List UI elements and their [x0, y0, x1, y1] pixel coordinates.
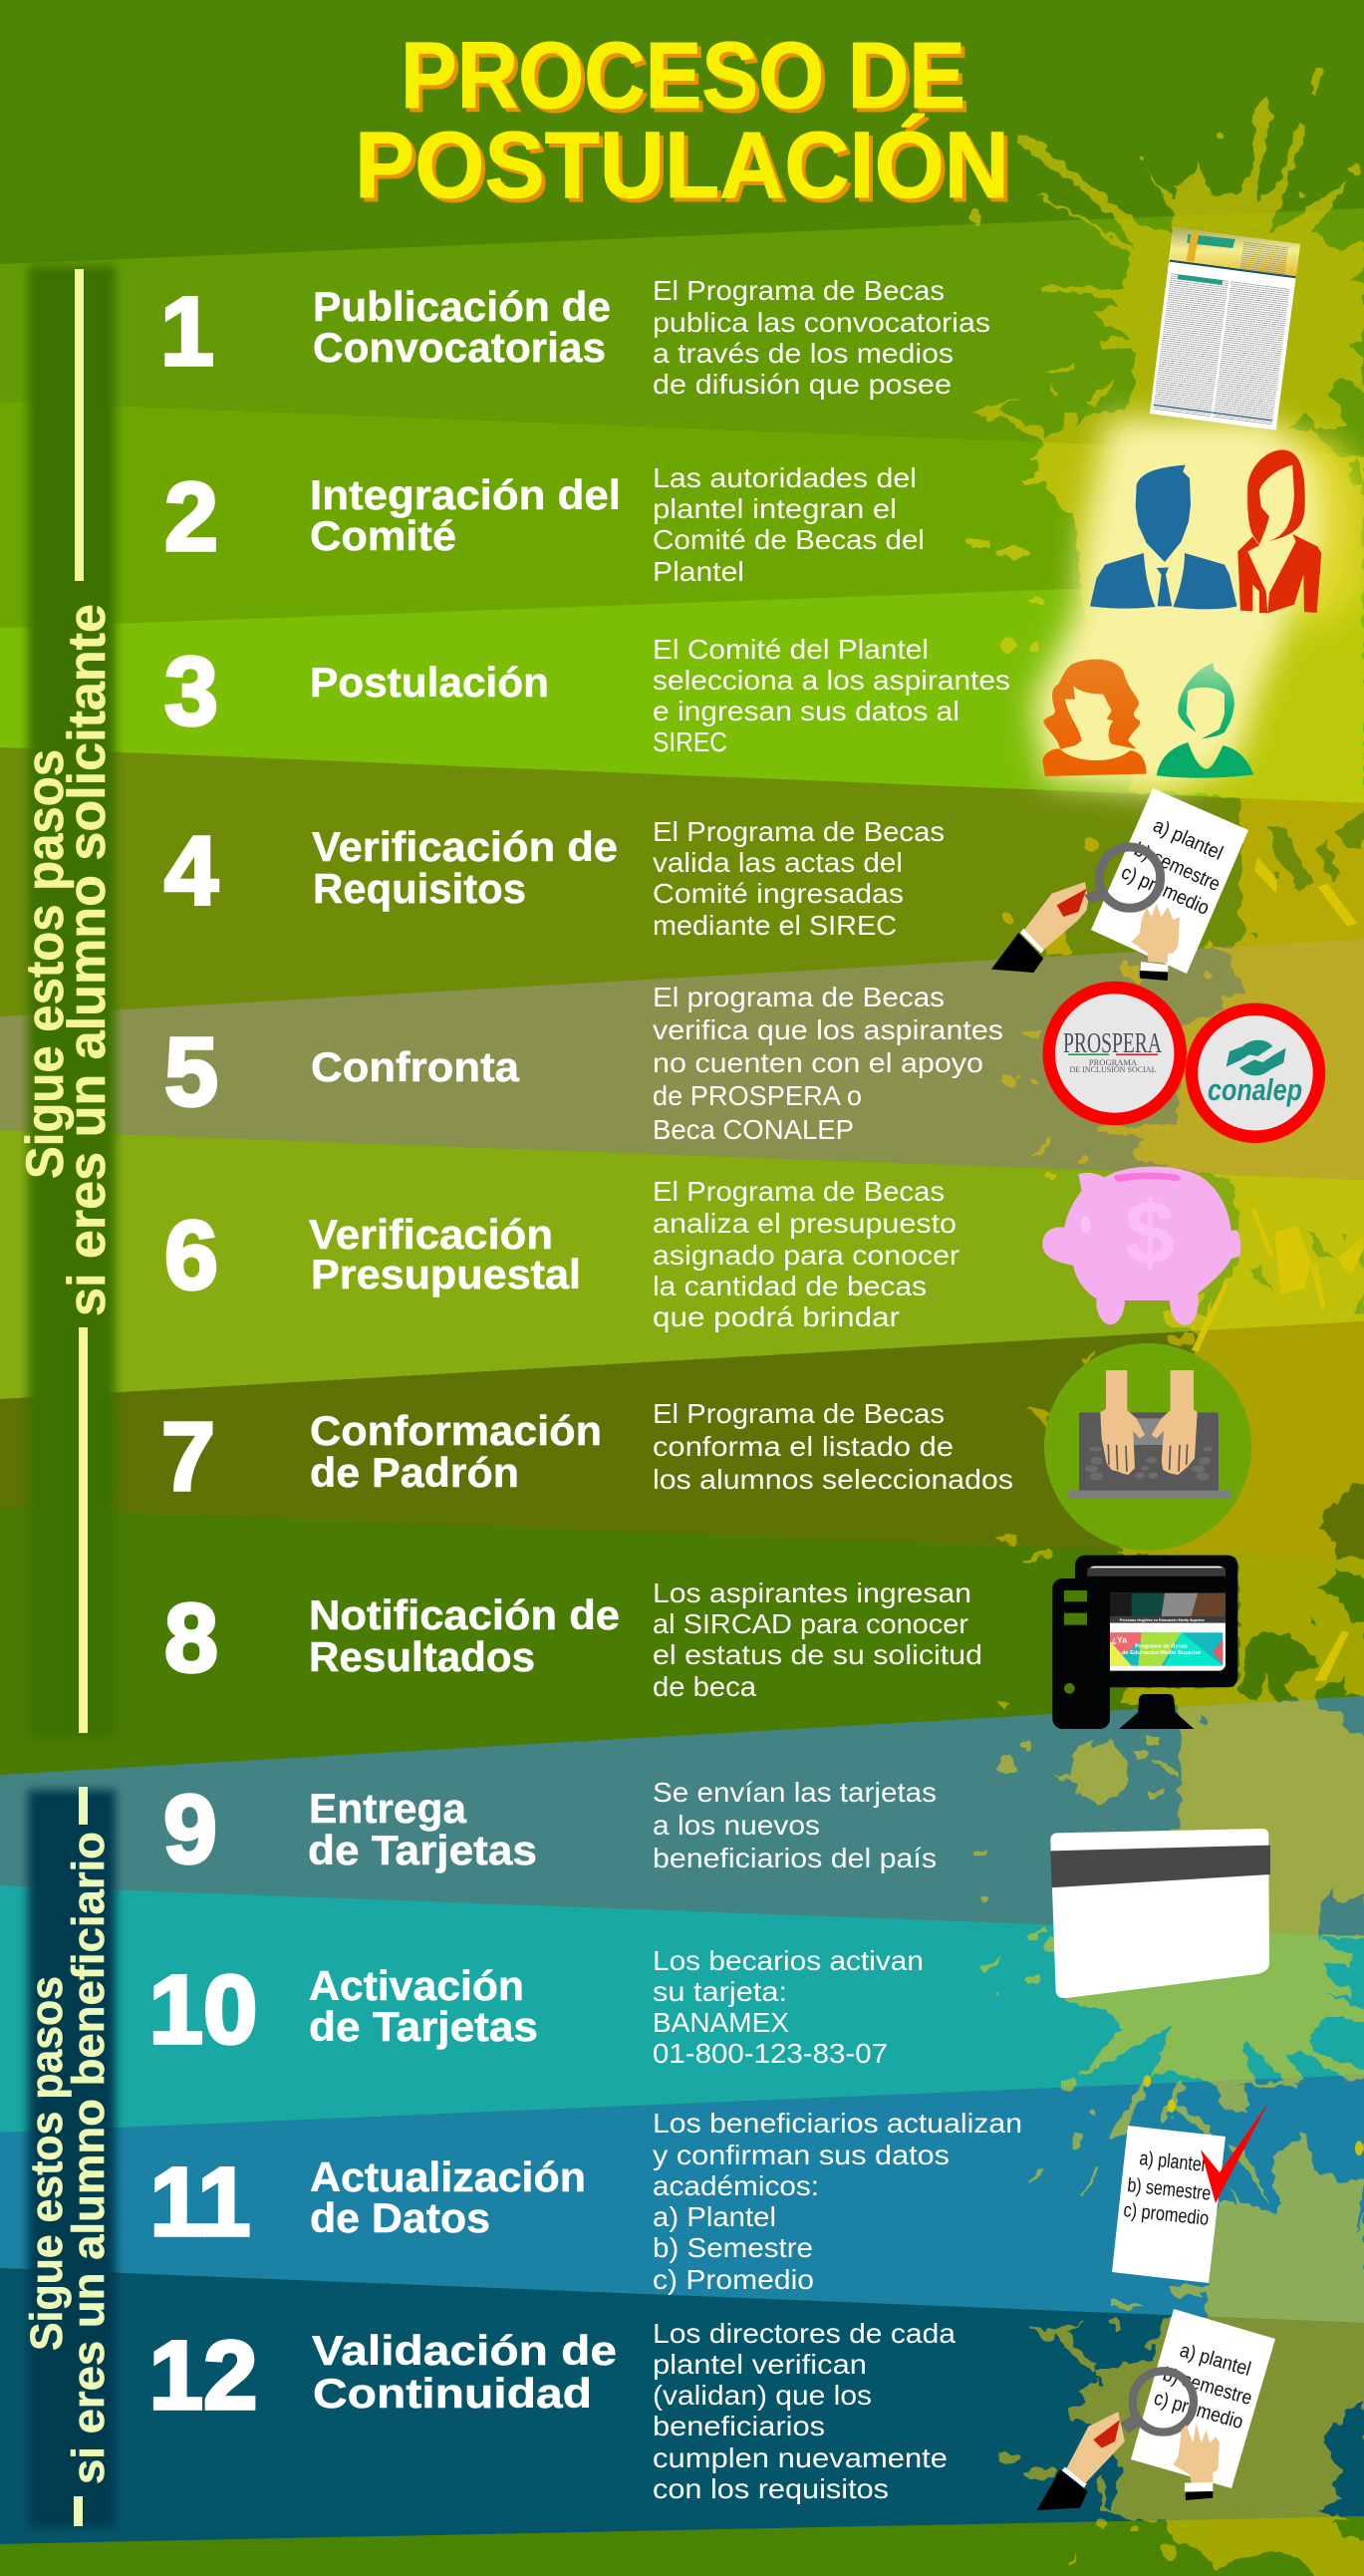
icon: piggy bank: $ [1125, 1184, 1175, 1284]
icon: hands with magnifier over a form: b) semestre [1161, 2364, 1254, 2410]
heading 10: Activación [309, 1962, 524, 2009]
icon: desktop computer with website [1052, 1556, 1237, 1729]
panel: step 10 [149, 1945, 924, 2069]
panel: step 9 [163, 1775, 1270, 1998]
sidebar: alumno beneficiario: Sigue estos pasos [21, 1976, 72, 2351]
icon: hands with magnifier over a form: c) promedio [1118, 861, 1213, 920]
description 5: verifica que los aspirantes [653, 1014, 1003, 1045]
heading 6: Presupuestal [311, 1251, 581, 1297]
heading 2: Integración del [310, 471, 621, 518]
icon: Conalep logo [1192, 1009, 1319, 1137]
description 4: mediante el SIREC [653, 910, 897, 941]
description 2: Comité de Becas del [653, 524, 925, 555]
description 3 [653, 634, 1010, 757]
heading 3: Postulación [310, 659, 549, 706]
description 8: el estatus de su solicitud [653, 1639, 982, 1670]
background: splash gaps [1095, 427, 1364, 2541]
description 3: e ingresan sus datos al [653, 696, 959, 726]
icon: checked form: a) plantel [1138, 2147, 1206, 2176]
description 2: Las autoridades del [653, 462, 917, 493]
description 9 [653, 1777, 937, 1873]
heading 8: Resultados [309, 1633, 535, 1680]
number 4: 4 [164, 816, 218, 925]
description 10: BANAMEX [653, 2007, 789, 2038]
icon: Prospera logo: DE INCLUSIÓN SOCIAL [1070, 1064, 1156, 1074]
number 8: 8 [164, 1583, 218, 1692]
description 3: El Comité del Plantel [653, 634, 929, 665]
background: yellow glow behind the people [1032, 419, 1364, 794]
icon: desktop computer with website: Personas elegibles en Educación Media Superior [1120, 1618, 1206, 1622]
description 4: Comité ingresadas [653, 878, 904, 909]
heading 9: de Tarjetas [308, 1827, 537, 1873]
description 11: y confirman sus datos [653, 2140, 950, 2170]
panel: step 1 [160, 227, 1300, 430]
panel: step 4 [164, 788, 1248, 981]
heading 10: de Tarjetas [309, 2003, 538, 2050]
title [355, 23, 1009, 218]
description 6: la cantidad de becas [653, 1271, 927, 1301]
description 5: de PROSPERA o [653, 1080, 862, 1111]
description 10: su tarjeta: [653, 1976, 787, 2007]
description 8: de beca [653, 1671, 756, 1702]
description 8: al SIRCAD para conocer [653, 1608, 968, 1639]
panel: step 8 [164, 1556, 1237, 1729]
sidebar: alumno solicitante [16, 265, 117, 1738]
description 10: Los becarios activan [653, 1945, 924, 1976]
description 11: b) Semestre [653, 2232, 813, 2263]
heading 7: Conformación [310, 1407, 602, 1454]
description 11: a) Plantel [653, 2201, 776, 2232]
heading 1: Convocatorias [313, 324, 606, 371]
description 6: analiza el presupuesto [653, 1208, 956, 1239]
heading 8 [309, 1591, 620, 1680]
description 10: 01-800-123-83-07 [653, 2038, 888, 2069]
number 2: 2 [164, 462, 218, 571]
description 9: Se envían las tarjetas [653, 1777, 937, 1808]
heading 9 [308, 1785, 537, 1873]
heading 10 [309, 1962, 538, 2050]
panel: step 2 [164, 450, 1321, 613]
description 12: Los directores de cada [653, 2318, 955, 2349]
description 12: con los requisitos [653, 2473, 889, 2504]
heading 1 [313, 283, 611, 371]
number 5: 5 [164, 1017, 218, 1126]
background: paint splashes [965, 68, 1364, 2576]
icon: hands with magnifier over a form: a) plantel [1178, 2340, 1253, 2381]
heading 6 [309, 1211, 581, 1297]
description 7 [653, 1398, 1013, 1495]
number 3: 3 [164, 637, 218, 745]
description 6: que podrá brindar [653, 1301, 900, 1332]
icon: Prospera logo: PROGRAMA [1089, 1057, 1138, 1067]
description 1 [653, 275, 990, 400]
description 8: Los aspirantes ingresan [653, 1577, 971, 1608]
heading 12 [312, 2327, 617, 2417]
heading 2 [310, 471, 621, 559]
icon: student silhouettes [1042, 660, 1253, 778]
icon: piggy bank [1042, 1167, 1240, 1325]
icon: hands with magnifier over a form: c) promedio [1152, 2388, 1245, 2433]
description 6: El Programa de Becas [653, 1176, 945, 1207]
icon: desktop computer with website: Programa de Becas [1135, 1643, 1188, 1649]
number 6: 6 [164, 1201, 218, 1309]
description 8 [653, 1577, 982, 1702]
description 1: publica las convocatorias [653, 307, 990, 338]
icon: hands on a laptop [1044, 1343, 1251, 1551]
heading 1: Publicación de [313, 283, 611, 330]
description 5 [653, 982, 1003, 1145]
description 9: beneficiarios del país [653, 1843, 937, 1873]
description 2 [653, 462, 925, 587]
description 1: El Programa de Becas [653, 275, 945, 306]
panel: step 7 [161, 1343, 1251, 1551]
icon: checked form: c) promedio [1122, 2199, 1210, 2230]
heading 12: Continuidad [313, 2370, 592, 2417]
number 7: 7 [161, 1402, 215, 1511]
icon: desktop computer with website: ¿Ya [1112, 1634, 1127, 1644]
description 12: plantel verifican [653, 2349, 867, 2380]
description 4: El Programa de Becas [653, 816, 945, 847]
icon: hands with magnifier over a form: a) plantel [1150, 814, 1227, 865]
description 11 [653, 2108, 1022, 2295]
sidebar: alumno beneficiario: si eres un alumno beneficiario [63, 1832, 114, 2484]
description 5: no cuenten con el apoyo [653, 1047, 983, 1078]
description 5: El programa de Becas [653, 982, 945, 1012]
description 11: c) Promedio [653, 2264, 814, 2295]
description 1: a través de los medios [653, 338, 954, 369]
panel: step 11 [149, 2103, 1268, 2295]
icon: Prospera logo [1049, 988, 1181, 1119]
heading 11 [310, 2153, 586, 2241]
background: yellow highlights [1143, 857, 1364, 2155]
panel: step 6 [164, 1167, 1240, 1332]
heading 8: Notificación de [309, 1591, 620, 1638]
description 11: académicos: [653, 2170, 819, 2201]
icon: hands with magnifier over a form [991, 788, 1248, 981]
description 12: cumplen nuevamente [653, 2442, 948, 2473]
description 12: (validan) que los [653, 2380, 872, 2411]
description 10 [653, 1945, 924, 2069]
description 2: Plantel [653, 556, 744, 587]
icon: Prospera logo: PROSPERA [1063, 1027, 1162, 1059]
number 12: 12 [149, 2321, 257, 2430]
description 7: los alumnos seleccionados [653, 1464, 1013, 1495]
icon: checked form: b) semestre [1126, 2174, 1212, 2205]
number 10: 10 [149, 1955, 257, 2064]
title: PROCESO DE [401, 23, 965, 129]
icon: desktop computer with website: de Educación Media Superior [1122, 1650, 1202, 1656]
heading 4: Verificación de [312, 823, 618, 870]
heading 7: de Padrón [310, 1449, 519, 1496]
heading 11: Actualización [310, 2153, 586, 2200]
sidebar: alumno beneficiario [21, 1787, 116, 2527]
heading 4 [312, 823, 618, 912]
description 7: El Programa de Becas [653, 1398, 945, 1429]
description 3: selecciona a los aspirantes [653, 665, 1010, 696]
number 9: 9 [163, 1775, 217, 1883]
description 6 [653, 1176, 959, 1332]
sidebar: alumno solicitante: Sigue estos pasos [16, 749, 75, 1179]
heading 4: Requisitos [313, 865, 526, 912]
description 11: Los beneficiarios actualizan [653, 2108, 1022, 2139]
panel: step 12 [149, 2309, 1275, 2510]
description 4: valida las actas del [653, 847, 903, 878]
icon: checked form [1112, 2103, 1268, 2283]
description 3: SIREC [653, 726, 727, 757]
heading 11: de Datos [310, 2194, 490, 2241]
icon: Conalep logo: conalep [1208, 1072, 1302, 1107]
heading 7 [310, 1407, 602, 1496]
panel: step 3 [164, 634, 1253, 778]
description 6: asignado para conocer [653, 1240, 959, 1271]
description 4 [653, 816, 945, 941]
description 5: Beca CONALEP [653, 1114, 854, 1145]
icon: hands with magnifier over a form [1037, 2309, 1275, 2510]
heading 9: Entrega [309, 1785, 467, 1832]
icon: convocatoria document [1150, 227, 1300, 430]
heading 6: Verificación [309, 1211, 553, 1258]
icon: hands with magnifier over a form: b) semestre [1131, 838, 1224, 896]
heading 12: Validación de [312, 2327, 617, 2374]
description 9: a los nuevos [653, 1810, 820, 1841]
panel: step 5 [164, 982, 1319, 1145]
description 1: de difusión que posee [653, 369, 952, 400]
description 7: conforma el listado de [653, 1431, 954, 1462]
heading 2: Comité [310, 512, 456, 559]
number 1: 1 [160, 277, 214, 386]
description 12: beneficiarios [653, 2411, 825, 2441]
description 12 [653, 2318, 955, 2504]
icon: man and woman silhouettes [1090, 450, 1321, 613]
sidebar: alumno solicitante: si eres un alumno solicitante [58, 604, 117, 1316]
number 11: 11 [149, 2147, 251, 2256]
title: POSTULACIÓN [355, 113, 1009, 218]
description 2: plantel integran el [653, 493, 897, 524]
heading 5: Confronta [311, 1043, 520, 1090]
icon: bank card [1050, 1829, 1270, 1998]
